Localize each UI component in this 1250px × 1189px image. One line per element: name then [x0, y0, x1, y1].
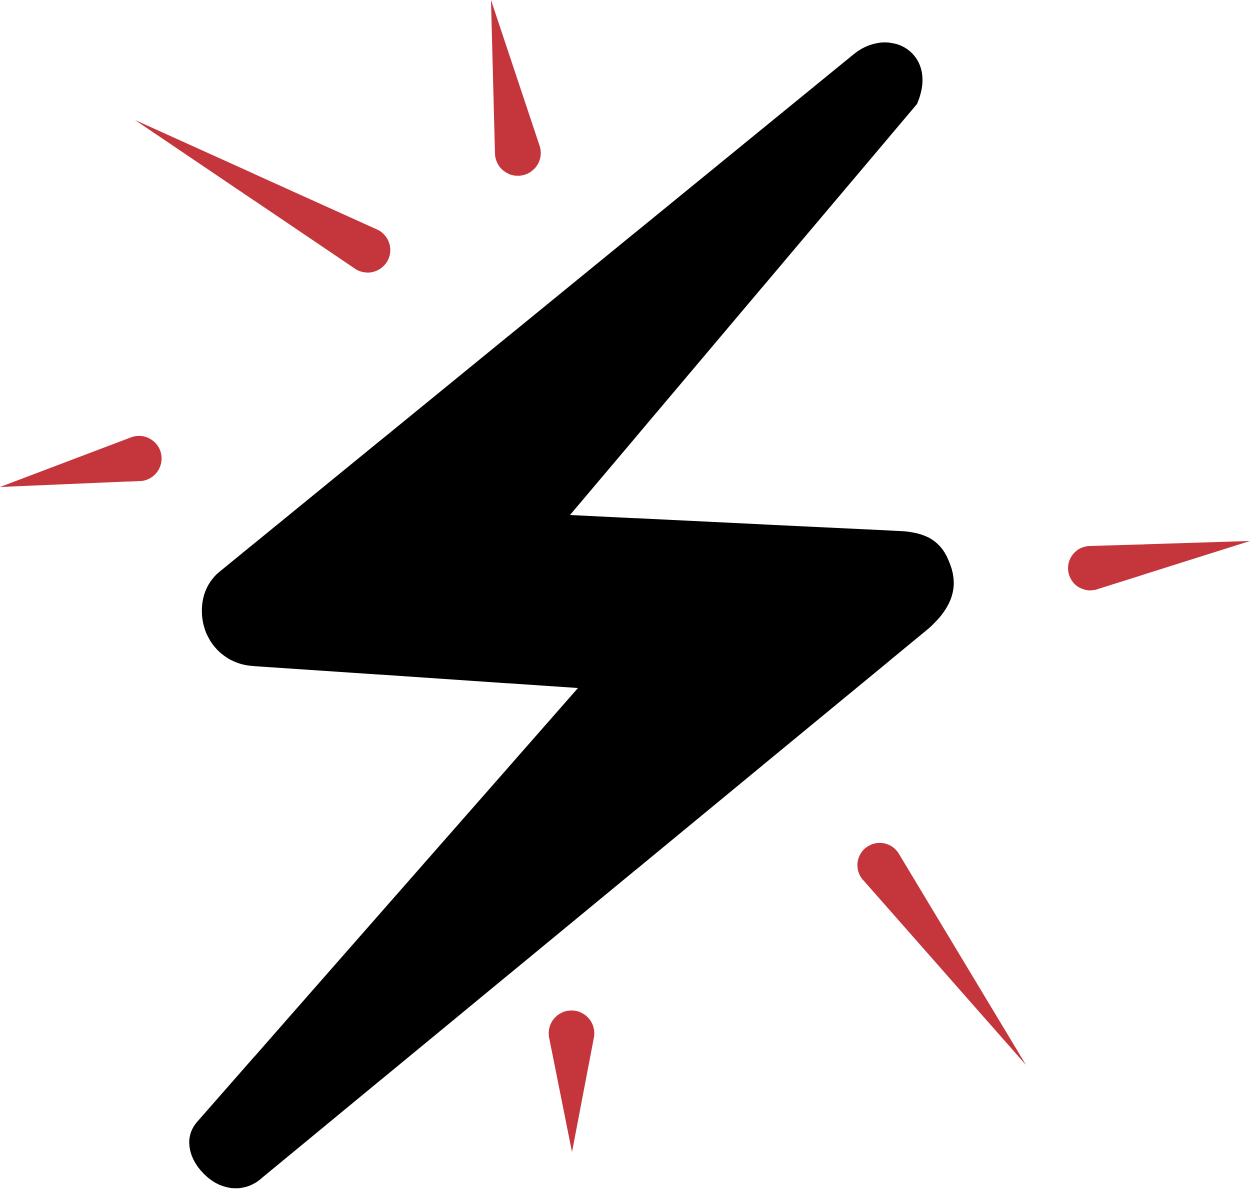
spark: upper left [135, 120, 390, 273]
spark: top [491, 0, 541, 176]
spark: lower right [857, 843, 1026, 1065]
spark: bottom [549, 1011, 594, 1152]
spark: right [1068, 541, 1250, 590]
spark: left [0, 436, 162, 487]
icon: black lightning bolt [189, 42, 954, 1188]
